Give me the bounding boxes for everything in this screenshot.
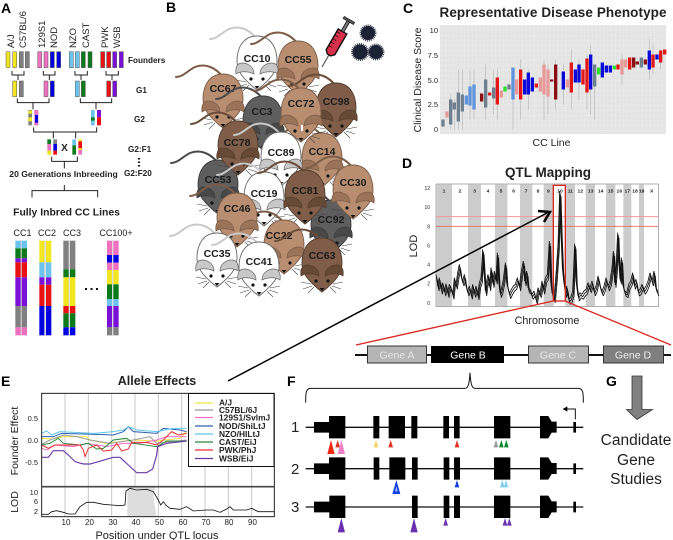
LOD plot: 16 [617, 189, 622, 195]
y axis ticks: 5.0 [428, 76, 438, 85]
panel letter G: G [606, 373, 617, 389]
inbred chromosomes [15, 241, 119, 335]
CC1 [15, 241, 27, 335]
founder strain labels: A/J [6, 34, 17, 48]
x axis label: CC Line [533, 137, 571, 149]
x ticks: 80 [225, 518, 234, 527]
mouse CC81 [258, 161, 326, 225]
LOD plot: 14 [598, 189, 604, 195]
y ticks: 0.0 [28, 436, 38, 445]
y axis ticks: 7.5 [428, 51, 438, 60]
down arrow [626, 376, 652, 420]
y axis ticks: 2 [427, 282, 430, 288]
y axis label: LOD: LOD [9, 491, 21, 513]
x ticks: 70 [202, 518, 211, 527]
LOD plot: 6 [512, 189, 515, 195]
founder strain labels: WSB [112, 26, 123, 48]
mouse CC22: CC22 [266, 230, 293, 242]
LOD plot: 13 [588, 189, 594, 195]
isoform 1 [306, 406, 583, 438]
gene B [431, 346, 504, 363]
mouse CC53 [171, 151, 239, 215]
panel letter D: D [402, 155, 412, 171]
mouse CC67: CC67 [210, 83, 237, 95]
icon: syringe [317, 16, 355, 70]
mouse CC30: CC30 [340, 177, 367, 189]
LOD plot: 15 [608, 189, 614, 195]
y axis ticks: 4 [427, 262, 430, 268]
mouse CC10 [210, 27, 278, 91]
plot background [440, 25, 666, 134]
gene A: Gene A [379, 350, 415, 362]
panel C: disease phenotype [403, 0, 667, 149]
mouse CC92 [284, 191, 352, 255]
y axis ticks [428, 26, 438, 134]
gene C [528, 346, 588, 363]
LOD plot: 7 [525, 189, 528, 195]
x ticks: 20 [85, 518, 94, 527]
gene D: Gene D [615, 350, 652, 362]
mouse CC67 [176, 65, 244, 129]
generation labels: G2:F20 [124, 169, 152, 178]
chart title: QTL Mapping [505, 165, 591, 180]
LOD plot: 11 [568, 189, 573, 195]
mouse CC78 [191, 112, 259, 176]
LOD plot: 2 [459, 189, 462, 195]
mouse CC89 [234, 123, 302, 187]
LOD plot: 19 [639, 189, 645, 195]
legend: CAST/EiJ [219, 437, 257, 447]
founder strain labels: C57BL/6 [18, 11, 29, 48]
CC3 [63, 241, 75, 335]
y axis ticks: 0 [434, 125, 438, 134]
founder strain labels: CAST [81, 22, 92, 48]
panel G: candidate gene studies [601, 373, 671, 488]
legend: C57BL/6J [219, 405, 258, 415]
generation labels: G2:F1 [128, 145, 152, 154]
mouse CC35 [170, 224, 238, 288]
mouse CC46 [190, 184, 258, 248]
effect and LOD plots [42, 393, 274, 517]
generation labels: G2 [134, 115, 145, 124]
LOD plot: 17 [625, 189, 630, 195]
y axis ticks: 6 [427, 244, 430, 250]
x ticks: 10 [62, 518, 71, 527]
chromosome funnel diagram [6, 52, 123, 197]
gene track [355, 346, 671, 363]
y axis ticks: 10 [430, 26, 438, 35]
mouse CC19 [217, 163, 285, 227]
legend [188, 394, 274, 466]
panel letter C: C [403, 0, 413, 16]
isoform numbers: 1 [291, 419, 299, 436]
CC2 [39, 241, 51, 335]
legend: PWK/PhJ [219, 445, 257, 455]
isoform 1 variants [327, 440, 509, 454]
gene D [604, 346, 664, 363]
y axis ticks: 0 [427, 301, 430, 307]
founder strain labels: NZO [68, 28, 79, 48]
LOD plot: 12 [578, 189, 583, 195]
x ticks: 50 [155, 518, 164, 527]
mouse CC30 [306, 156, 374, 220]
mouse CC72: CC72 [288, 98, 315, 110]
arrow: allele effects to QTL peak [228, 211, 550, 381]
x axis label: Chromosome [515, 315, 579, 327]
isoform 2 variants [392, 480, 508, 494]
panel letter E: E [1, 373, 10, 389]
panel F: gene isoforms [287, 373, 583, 532]
x ticks: 40 [132, 518, 141, 527]
gene A [368, 346, 426, 363]
generation labels: Founders [128, 56, 166, 65]
candidate text [601, 432, 671, 488]
y axis ticks: 8 [427, 224, 430, 230]
legend: 129S1/SvlmJ [219, 412, 271, 422]
LOD plot: X [650, 189, 654, 195]
isoform numbers: 2 [291, 461, 299, 478]
founder strain labels [6, 11, 123, 48]
isoform 3 variants [338, 518, 512, 532]
LOD plot: 3 [473, 189, 476, 195]
mouse CC55 [251, 32, 319, 96]
candidate text: Candidate [601, 432, 671, 449]
generation dots [138, 158, 140, 166]
isoform numbers: 3 [291, 499, 299, 516]
isoform numbers [291, 419, 299, 516]
mouse CC98: CC98 [323, 96, 350, 108]
y ticks: 6 [34, 497, 38, 506]
LOD plot: 9 [547, 189, 550, 195]
x ticks: 60 [179, 518, 188, 527]
mouse CC41 [212, 233, 280, 297]
mouse CC72 [254, 79, 322, 143]
y axis label: LOD [408, 235, 420, 257]
legend: A/J [219, 398, 232, 408]
mouse CC35: CC35 [204, 248, 231, 260]
CC line labels: CC3 [63, 228, 81, 238]
gene B: Gene B [450, 350, 486, 362]
plot grid [440, 25, 666, 134]
y ticks [25, 414, 38, 516]
box plots [441, 40, 666, 130]
panel D: QTL mapping [355, 155, 671, 363]
CC line labels: CC2 [38, 228, 56, 238]
x ticks [62, 518, 257, 527]
mouse CC22 [237, 211, 305, 275]
mouse CC78: CC78 [224, 137, 251, 149]
inbreeding label: 20 Generations Inbreeding [9, 169, 118, 179]
mouse CC92: CC92 [318, 214, 345, 226]
mouse CC98 [289, 74, 357, 138]
mouse CC89: CC89 [268, 147, 295, 159]
legend: NOD/ShiLtJ [219, 421, 266, 431]
founder strain labels: NOD [49, 27, 60, 48]
mouse CC3 [216, 87, 284, 151]
LOD plot: 10 [557, 189, 563, 195]
legend: NZO/HILtJ [219, 429, 260, 439]
y axis ticks: 12 [424, 186, 430, 192]
mouse CC81: CC81 [292, 185, 319, 197]
CC line labels: CC1 [13, 228, 32, 238]
chart title: Allele Effects [118, 374, 196, 388]
cross symbol: X [61, 143, 68, 154]
mouse CC46: CC46 [224, 203, 251, 215]
founder strain labels: 129S1 [37, 21, 48, 48]
founder strain labels: PWK [100, 26, 111, 48]
y axis ticks: 2.5 [428, 100, 438, 109]
mouse CC63: CC63 [309, 250, 336, 262]
mouse CC41: CC41 [246, 256, 273, 268]
mouse CC55: CC55 [285, 54, 312, 66]
y axis ticks [424, 186, 430, 307]
candidate text: Gene [617, 452, 655, 469]
mouse CC14 [275, 124, 343, 188]
isoform 3 [306, 496, 583, 518]
chart title: Representative Disease Phenotype [440, 5, 667, 20]
generation labels [124, 56, 166, 178]
CC line labels: CC100+ [99, 228, 133, 238]
x ticks: 90 [248, 518, 257, 527]
zoom lines [356, 301, 671, 345]
mouse CC63 [275, 229, 343, 293]
y ticks: 2 [34, 507, 38, 516]
inbred lines heading: Fully Inbred CC Lines [13, 208, 120, 218]
CC line labels [13, 228, 133, 238]
mouse CC14: CC14 [309, 146, 336, 158]
LOD plot: 5 [500, 189, 503, 195]
mouse CC19: CC19 [251, 188, 278, 200]
icon: virus particles [352, 26, 383, 60]
y axis label: Clinical Disease Score [412, 27, 424, 133]
panel letter F: F [287, 373, 296, 389]
panel letter A: A [1, 0, 11, 16]
generation labels: G1 [136, 86, 147, 95]
panel E: allele effects [1, 373, 274, 540]
brace [306, 373, 583, 403]
legend: WSB/EiJ [219, 454, 254, 464]
y ticks: 10 [30, 488, 38, 497]
panel A: breeding funnel [1, 0, 166, 335]
y ticks: 0.5 [28, 414, 38, 423]
y ticks: -0.5 [25, 458, 38, 467]
LOD plot: 4 [487, 189, 490, 195]
LOD plot: 1 [443, 189, 446, 195]
x ticks: 30 [109, 518, 118, 527]
mouse CC53: CC53 [205, 174, 232, 186]
mouse CC3: CC3 [251, 106, 273, 118]
LOD plot: 18 [632, 189, 638, 195]
panel B: CC mice [166, 0, 383, 297]
LOD plot: 8 [537, 189, 540, 195]
mouse CC10: CC10 [244, 53, 271, 65]
y axis label: founder effect: Founder Effect [9, 407, 21, 475]
LOD plot [436, 184, 659, 307]
ellipsis [85, 288, 98, 290]
CC100+ [107, 241, 119, 335]
y axis ticks: 10 [424, 205, 430, 211]
isoform 2 [306, 457, 583, 480]
candidate text: Studies [610, 471, 662, 488]
gene C: Gene C [540, 350, 577, 362]
